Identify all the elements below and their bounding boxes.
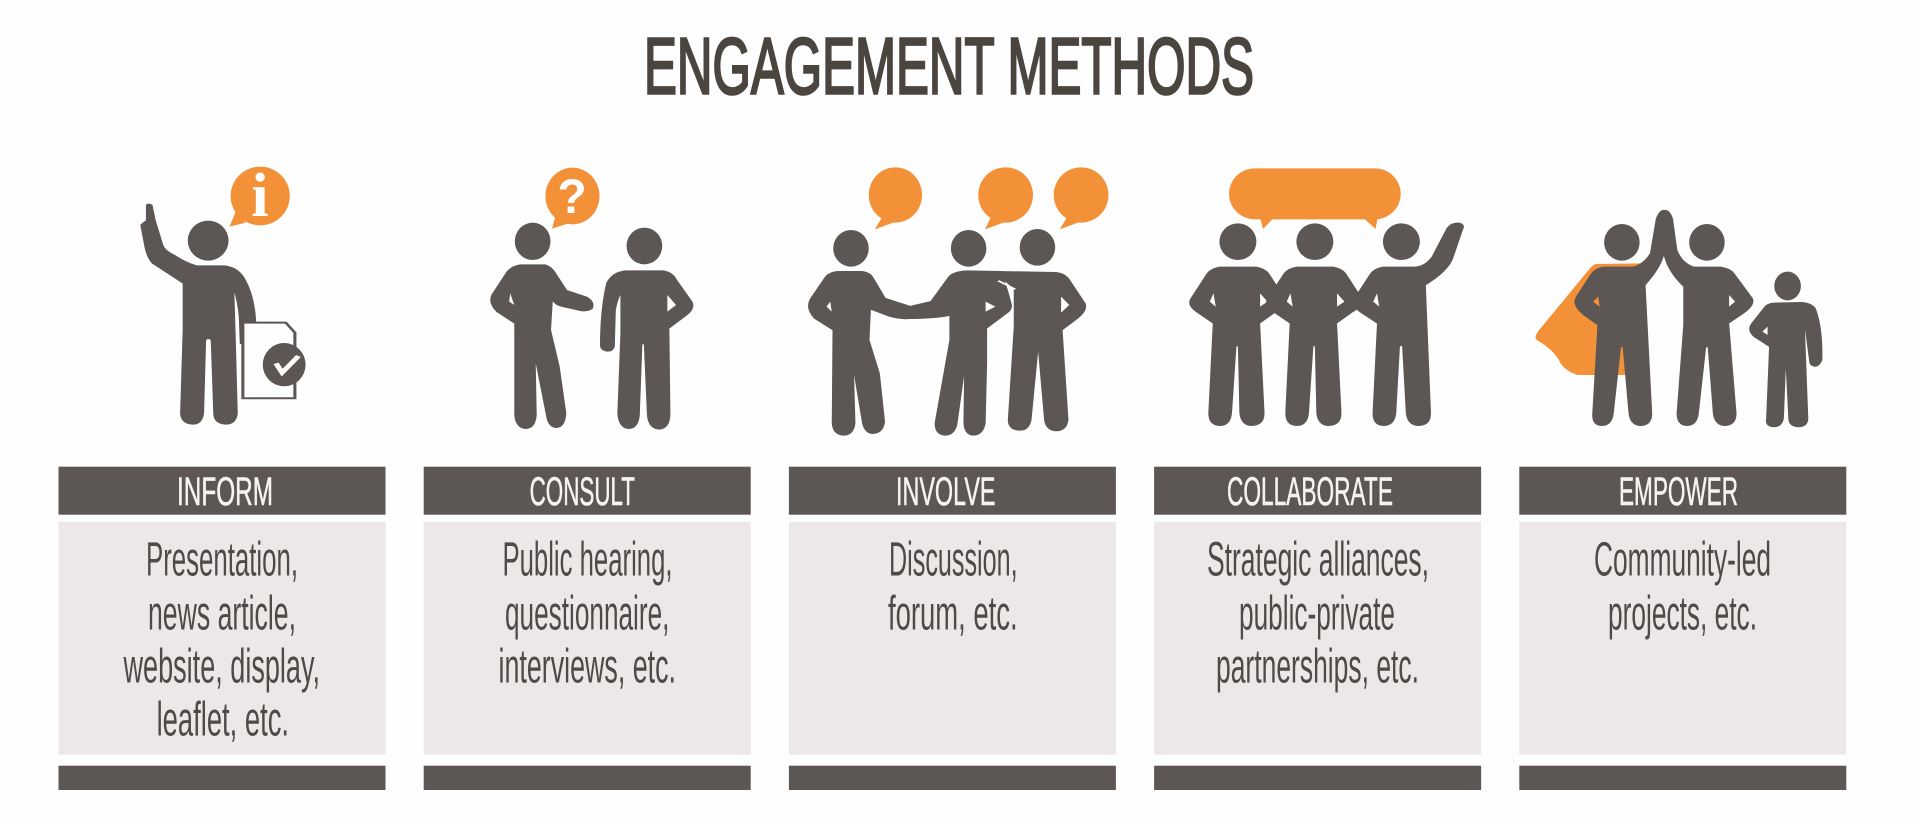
header: collaborate: COLLABORATE xyxy=(1227,470,1393,514)
icon: person presenting with info bubble and document: i xyxy=(251,162,269,230)
body: inform methods: leaflet, etc. xyxy=(157,694,289,746)
body: consult methods: interviews, etc. xyxy=(498,640,676,694)
footer bar: empower xyxy=(1519,766,1846,790)
header: inform xyxy=(58,467,386,515)
body: involve methods: forum, etc. xyxy=(888,588,1018,640)
icon: three people under a shared speech bubble xyxy=(1191,168,1462,425)
icon: caped people high-fiving with a child xyxy=(1536,211,1821,427)
footer bar: involve xyxy=(789,766,1116,790)
body: involve methods: Discussion, xyxy=(889,534,1018,586)
panel: inform xyxy=(58,162,386,790)
body: consult methods xyxy=(424,522,751,755)
header: empower: EMPOWER xyxy=(1619,470,1738,514)
header: collaborate xyxy=(1154,467,1481,515)
icon: two people with question bubble: ? xyxy=(557,171,587,224)
body: collaborate methods: Strategic alliances, xyxy=(1207,534,1429,586)
title: ENGAGEMENT METHODS xyxy=(644,22,1254,110)
panel: empower xyxy=(1519,211,1846,790)
body: involve methods xyxy=(789,522,1116,755)
body: consult methods: Public hearing, xyxy=(502,534,672,586)
body: consult methods: questionnaire, xyxy=(505,588,669,640)
icon: person presenting with info bubble and document xyxy=(141,162,306,424)
header: inform: INFORM xyxy=(177,470,273,514)
panel: consult xyxy=(424,168,751,790)
header: involve xyxy=(789,467,1116,515)
body: inform methods: Presentation, xyxy=(146,534,298,586)
body: empower methods xyxy=(1519,522,1846,755)
body: collaborate methods xyxy=(1154,522,1481,755)
header: consult xyxy=(424,467,751,515)
body: inform methods xyxy=(58,522,386,755)
panel: collaborate xyxy=(1154,168,1481,790)
body: collaborate methods: public-private xyxy=(1239,588,1395,640)
footer bar: inform xyxy=(58,766,386,790)
header: consult: CONSULT xyxy=(530,470,635,514)
icon: three people shaking hands with speech bubbles xyxy=(810,167,1108,435)
header: empower xyxy=(1519,467,1846,515)
icon: two people with question bubble xyxy=(491,168,692,429)
header: involve: INVOLVE xyxy=(896,470,996,514)
body: empower methods: projects, etc. xyxy=(1608,588,1757,640)
body: collaborate methods: partnerships, etc. xyxy=(1216,640,1419,694)
body: inform methods: news article, xyxy=(148,588,296,640)
panel: involve xyxy=(789,167,1116,790)
body: empower methods: Community-led xyxy=(1594,534,1771,586)
body: inform methods: website, display, xyxy=(123,640,320,694)
footer bar: consult xyxy=(424,766,751,790)
footer bar: collaborate xyxy=(1154,766,1481,790)
